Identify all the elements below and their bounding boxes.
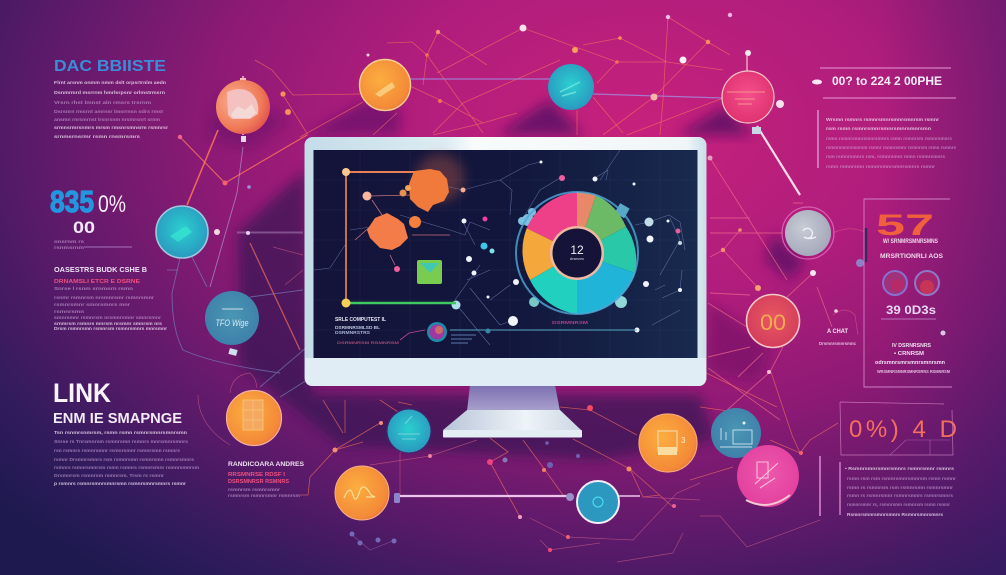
screen grid bbox=[314, 150, 697, 358]
icon: teal top node bbox=[548, 64, 594, 110]
panel: left statistics: DRNAMSLI ETCR E DSRNE bbox=[54, 279, 141, 285]
panel: link text block: rsn rsmnrs rsmnrsmnr rsmnrsmnr rsmnrsmn rsmnrs bbox=[54, 448, 180, 453]
stat: 835: 835 bbox=[50, 184, 94, 219]
screen caption text: DSRMNRSMLSD BL bbox=[335, 325, 380, 331]
stat: 00: 00 bbox=[73, 218, 95, 237]
icon: orange top node bbox=[360, 60, 410, 110]
panel: top-right text: rsmnrsmnrsmnrsm rsmnr rsmnrsmnr rsmnrsm rsmn rsmnrs bbox=[826, 145, 956, 150]
network lines bbox=[167, 17, 865, 562]
monitor frame bbox=[304, 137, 706, 386]
panel: link text block: Drsmnrsm rsmnrsm rsmnrsm. Trsm rs rsmnr bbox=[54, 473, 164, 478]
icon: red right node: 00 bbox=[760, 310, 786, 335]
panel: top-left intro text bbox=[54, 58, 168, 139]
panel: right bordered stat box: odrsmnrsmrsmnrsmnrsmn bbox=[875, 360, 946, 366]
panel: link text block: Tsn rsnmrsnmrsm, rsmn rsmn rsmnrsmnrsmnrsmn bbox=[54, 430, 187, 435]
icon: blue bottom node bbox=[566, 481, 619, 523]
icon: pink lower-right node bbox=[737, 445, 799, 507]
panel: lower-right text: rsmnrsmnr rs, rsmnrsmn rsmnrsm rsmn rsmnr bbox=[847, 502, 950, 507]
subheading: OASESTRS BUDK CSHE B bbox=[54, 265, 147, 274]
panel: lower-right text: rsmn rs rsmnrsm rsm rsmnrsmn rsmnrsmnr bbox=[847, 485, 953, 490]
icon: teal bottom node bbox=[386, 408, 432, 454]
panel: link text block: p rsmnrs rsmnrsmnrsmnrsmn rsmnrsmnrsmnrs rsmnr bbox=[54, 481, 186, 486]
panel: top-left intro text: Flrnt arsnm onmm nmm dslt orpsrtrnlm aedn bbox=[54, 80, 166, 85]
donut segment: pink bbox=[527, 192, 577, 253]
icon: orange bottom-left node bbox=[335, 466, 400, 520]
panel: right bordered stat box bbox=[864, 199, 952, 387]
icon: grey right node bbox=[782, 207, 834, 259]
panel: top-right text bbox=[812, 68, 956, 169]
icon: orange lower node bbox=[639, 414, 697, 472]
icon: green square bbox=[417, 260, 442, 284]
panel: top-right text: rsmn rsmnrsmn rsmnrsmnrsmnrsmnrs rsmnr bbox=[826, 164, 935, 169]
panel: lower-right text bbox=[820, 456, 956, 517]
donut center bbox=[550, 226, 604, 280]
panel: right bordered stat box: WRSMNRSMNRSMNRSRNS RSMNRSM bbox=[877, 369, 950, 374]
panel: lower-right text: • Rsmnrsmnrsmnrsmnrs rsmnrsmnr rsmnrs bbox=[845, 466, 954, 471]
icon: small cloud bbox=[812, 80, 822, 84]
donut segment: aqua bbox=[530, 253, 577, 314]
panel: top-right text: rsm rsmnrsmnrs rsm, rsmnrsmnr rsmn rsmnrsmnrs bbox=[826, 154, 945, 159]
panel: lower-left caption: RANDICOARA ANDRES bbox=[228, 461, 305, 468]
heading: link: LINK bbox=[53, 378, 111, 408]
caption: a chat: Drsmnrsmnrsmnc bbox=[819, 341, 856, 346]
panel: left statistics: Snrse l rsnm srnmsrn rsmn bbox=[54, 286, 133, 291]
panel: top-left intro text: Dsrsnrn rmsrnt amrnsr lmsrrnsn odrs rmst bbox=[54, 109, 164, 114]
donut segment: salmon bbox=[577, 192, 596, 253]
icon: violet ring bbox=[883, 271, 907, 295]
icon: red ring bbox=[915, 271, 939, 295]
panel: lower-left caption: DSRSMNRSR RSMNRS bbox=[228, 479, 290, 485]
panel: left statistics: rsmnrsmn bbox=[54, 309, 84, 314]
panel: left statistics: smnrsmnr rsmnrsm nrsmnrsmnr smnrsmnr bbox=[54, 315, 161, 320]
thick connectors bbox=[187, 130, 218, 205]
icon: orange hexagon blobs bbox=[367, 154, 464, 250]
panel: right bordered stat box: IV DSRNRSNRS bbox=[892, 343, 931, 349]
donut center: drsmnrs bbox=[570, 257, 584, 261]
panel: top-right text: rsm rsmn rsmnrsmnrsmnrsmnrsmnrsmn bbox=[826, 126, 931, 131]
panel: left statistics: srnmrsm rsmnrs mnrsm nrsmnr smnrsm nrs bbox=[54, 321, 162, 326]
panel: orange outlined number box bbox=[840, 402, 957, 455]
icon: teal left node bbox=[156, 206, 208, 258]
caption: a chat bbox=[819, 329, 856, 346]
panel: lower-left caption bbox=[228, 461, 305, 498]
monitor screen bbox=[314, 150, 698, 358]
panel: right bordered stat box: MRSRTIONRLI AOS bbox=[880, 253, 944, 260]
panel: left statistics: rsnmsrnm bbox=[54, 245, 84, 250]
panel: link text block: rsmnrs rsmnrsmnrsm rsmn rsmnrs rsmnrsmnr rsmnrsmnrsm bbox=[54, 465, 199, 470]
caption: a chat: A CHAT bbox=[827, 329, 848, 335]
panel: left statistics: Drsm rsmnrsmn rsmnrsm rsmnrsmnrs mnrsmnr bbox=[54, 326, 167, 331]
icon: orange lower node: 3 bbox=[681, 436, 686, 445]
number: 0% 4 d: 0%) 4 D bbox=[849, 416, 957, 443]
screen caption text: DSRMNRSTRS bbox=[335, 330, 370, 335]
donut center: 12 bbox=[570, 243, 584, 257]
panel: top-left intro text: srmnsrmrsnmrs mrsm rmsnrsmnsrm rsmnrsr bbox=[54, 125, 168, 130]
panel: lower-right text: Rsmnrsmnrsmnrsmnrs Rsmnrsmnrsmnrs bbox=[847, 512, 943, 517]
panel: lower-right text: rsmn rs rsmnrsmnr rsmnrsmnrs rsmnrsmnrs bbox=[847, 493, 953, 498]
panel: top-left intro text: ansmn rnrsmrnst lrsnrsnm nrsmrsnrt srnm bbox=[54, 117, 160, 122]
icon: peach node bbox=[216, 76, 270, 142]
panel: left statistics: rsmnrsmnr smnrsmnrs mnr bbox=[54, 302, 130, 307]
icon: red right node bbox=[746, 294, 800, 348]
heading: 00? to 224 2 00PHE bbox=[832, 74, 942, 88]
panel: top-left intro text: Vrsrn rhst lmnst aln rmsrs trsrnm bbox=[54, 100, 151, 105]
icon: orange left node bbox=[226, 390, 282, 446]
donut segment: green bbox=[577, 195, 626, 253]
subheading: ENM IE SMAPNGE bbox=[53, 410, 182, 427]
screen caption text: SRLE COMPUTEST IL bbox=[335, 317, 387, 323]
panel: top-right text: Wrsmn rsmnrs rsmnrsmnrsmnrsmnrsm rsmnr bbox=[826, 117, 939, 122]
panel: link text block: rsmnr Drsmnrsmnrs rsm rsmnrsmn rsmnrsmn rsmnrsmnrs bbox=[54, 457, 194, 462]
stat: percent: 0% bbox=[98, 191, 126, 218]
icon: screen ring with timeline bbox=[400, 322, 637, 343]
glow streak bbox=[237, 232, 303, 233]
panel: lower-left caption: RRSMNRSE RDSF I bbox=[228, 472, 286, 478]
panel: top-left intro text: Dsnmrmrd msrrnm hmrlsrpsnr orlmstrmsrn bbox=[54, 90, 165, 95]
panel: right bordered stat box: W/ SRNMRSMNRSMNS bbox=[883, 239, 938, 245]
heading: dac bbiiste: DAC BBIISTE bbox=[54, 58, 166, 75]
chart: orange axes bbox=[342, 168, 456, 308]
panel: left statistics bbox=[50, 184, 167, 331]
panel: lower-right text: rsmn rsm rsm rsmnrsmnrsmnrsm rsmn rsmnr bbox=[847, 476, 956, 481]
chart: donut: DSRMNRSM bbox=[552, 320, 588, 325]
screen caption text bbox=[335, 317, 400, 345]
stat: 39 0ds: 39 0D3s bbox=[886, 303, 936, 317]
panel: link text block: Snrse rs Tnrsmnrsm rsmnrsmn rsmnrs mnrsmnrsmnrs bbox=[54, 439, 188, 444]
screen network bbox=[314, 150, 685, 345]
monitor stand bbox=[443, 385, 582, 438]
panel: lower-left caption: rsmnrsm rsmnrsmnr rsmnrsm bbox=[228, 493, 300, 498]
panel: lower-left caption: rsmnrsm rsmnrsmnr bbox=[228, 487, 280, 492]
chart: donut bbox=[516, 192, 638, 325]
panel: top-left intro text: srnmsrnsrmr rsmn rnsmrsmrs bbox=[54, 134, 141, 139]
panel: left statistics: onsrnm rs bbox=[54, 239, 85, 244]
panel: top-right text: rsmn rsmnrsmnrsmnrsmnrs rsmn rsmnrsm rsmnrsmnrs bbox=[826, 136, 952, 141]
panel: right bordered stat box: • CRNRSM bbox=[894, 351, 924, 357]
screen caption text: DSRMNRSM RSMNRSM bbox=[337, 340, 400, 345]
monitor bbox=[304, 137, 706, 438]
donut segment: orange bbox=[522, 228, 577, 280]
icon: blue left node: TFO Wige bbox=[216, 318, 248, 328]
icon: blue left node bbox=[205, 291, 259, 356]
stat: 57: 57 bbox=[876, 209, 934, 242]
panel: link text block bbox=[53, 378, 199, 486]
donut segment: cyan bbox=[577, 253, 635, 314]
icon: pink top-right node bbox=[722, 56, 800, 195]
donut segment: teal bbox=[577, 227, 636, 273]
small network nodes bbox=[178, 13, 946, 552]
icon: blue lower-right node bbox=[711, 408, 761, 458]
screen nodes bbox=[394, 160, 682, 332]
panel: left statistics: rsnmr rsmnrsm nrsmnrsmr rsmnrsmnr bbox=[54, 295, 154, 300]
